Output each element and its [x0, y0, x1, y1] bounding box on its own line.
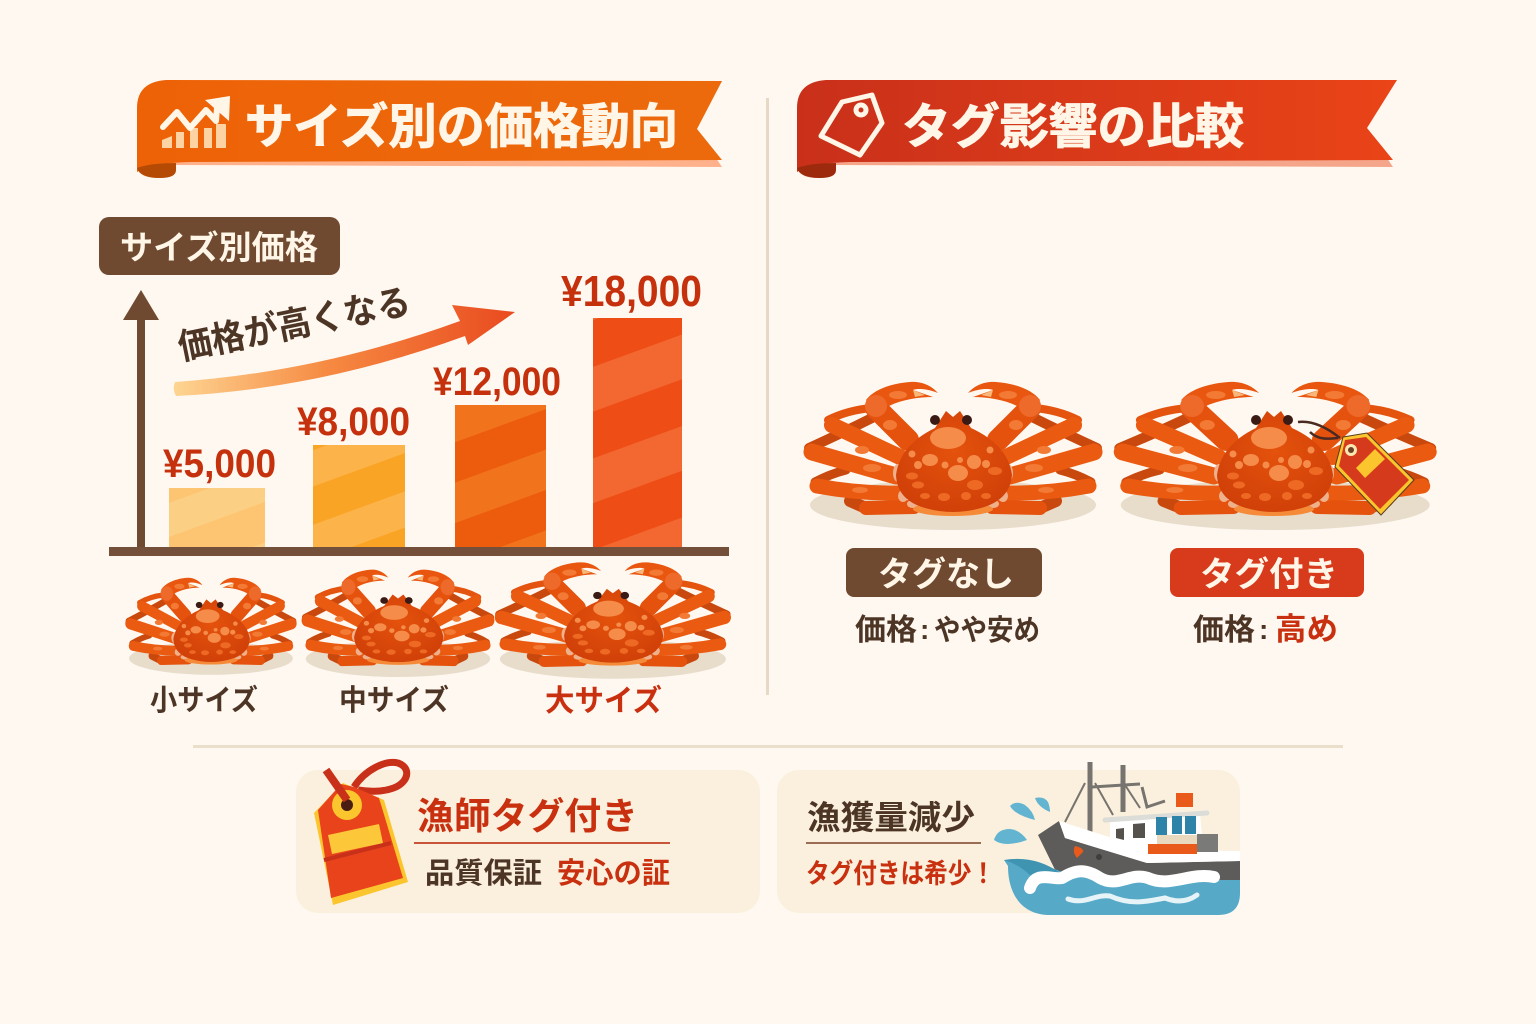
droplets — [994, 798, 1050, 844]
panel text: assurance: 安心の証 — [557, 857, 670, 890]
crab: with tag — [1120, 382, 1431, 530]
bar: extra large — [593, 318, 682, 548]
label: medium size: 中サイズ — [339, 683, 449, 717]
panel text: quality: 品質保証 — [425, 857, 542, 890]
chart label — [99, 217, 340, 275]
crab: without tag — [809, 382, 1097, 530]
price: 12000: ¥12,000 — [433, 360, 561, 404]
price: 8000: ¥8,000 — [297, 400, 410, 444]
price note: high — [1193, 612, 1338, 647]
panel: catch decline — [777, 762, 1240, 915]
panel: fisher tag — [296, 762, 760, 913]
bar: large — [455, 405, 546, 548]
bar chart: price by size — [99, 217, 729, 556]
bar: small — [169, 488, 265, 548]
icon: tag outline — [821, 95, 882, 155]
masts — [1065, 762, 1165, 832]
icon: fishing boat — [994, 762, 1240, 915]
icon: rising chart — [162, 96, 230, 148]
price: 5000: ¥5,000 — [163, 442, 276, 486]
heading banner: tag comparison — [797, 80, 1397, 178]
trend label: 価格が高くなる — [174, 281, 414, 368]
price note: high: : — [1259, 614, 1268, 645]
panel title: 漁師タグ付き — [417, 796, 638, 837]
crab: large — [499, 562, 727, 679]
chart label: サイズ別価格 — [120, 229, 318, 266]
label: small size: 小サイズ — [150, 683, 258, 717]
waves — [1030, 871, 1214, 888]
icon: large tag — [314, 762, 408, 905]
trend arrow — [174, 305, 515, 396]
panel title: 漁獲量減少 — [807, 799, 975, 836]
heading text: タグ影響の比較 — [902, 101, 1244, 154]
water — [1004, 860, 1240, 915]
heading banner: size price trend — [137, 80, 722, 178]
crab: medium — [305, 570, 491, 677]
y axis arrow — [123, 290, 159, 550]
price: 18000: ¥18,000 — [561, 267, 702, 316]
price note: slightly cheap — [855, 614, 1040, 647]
panel text: rare: タグ付きは希少！ — [806, 858, 995, 889]
crab: small — [128, 578, 293, 675]
price note: slightly cheap: やや安め — [934, 614, 1040, 647]
hull — [1038, 821, 1240, 890]
tag on crab — [1298, 422, 1414, 515]
badge: no tag — [846, 548, 1042, 597]
badge: with tag — [1170, 548, 1364, 597]
price note: high: 高め — [1275, 612, 1338, 647]
badge: with tag: タグ付き — [1200, 556, 1338, 594]
badge: no tag: タグなし — [878, 556, 1014, 594]
price note: high: 価格 — [1193, 614, 1255, 647]
label: large size: 大サイズ — [545, 684, 662, 718]
price note: slightly cheap: 価格 — [855, 614, 917, 647]
x axis — [109, 547, 729, 556]
heading text: サイズ別の価格動向 — [245, 101, 678, 154]
price note: slightly cheap: : — [920, 614, 929, 645]
cabin — [1110, 815, 1202, 850]
bar: medium — [313, 445, 405, 548]
